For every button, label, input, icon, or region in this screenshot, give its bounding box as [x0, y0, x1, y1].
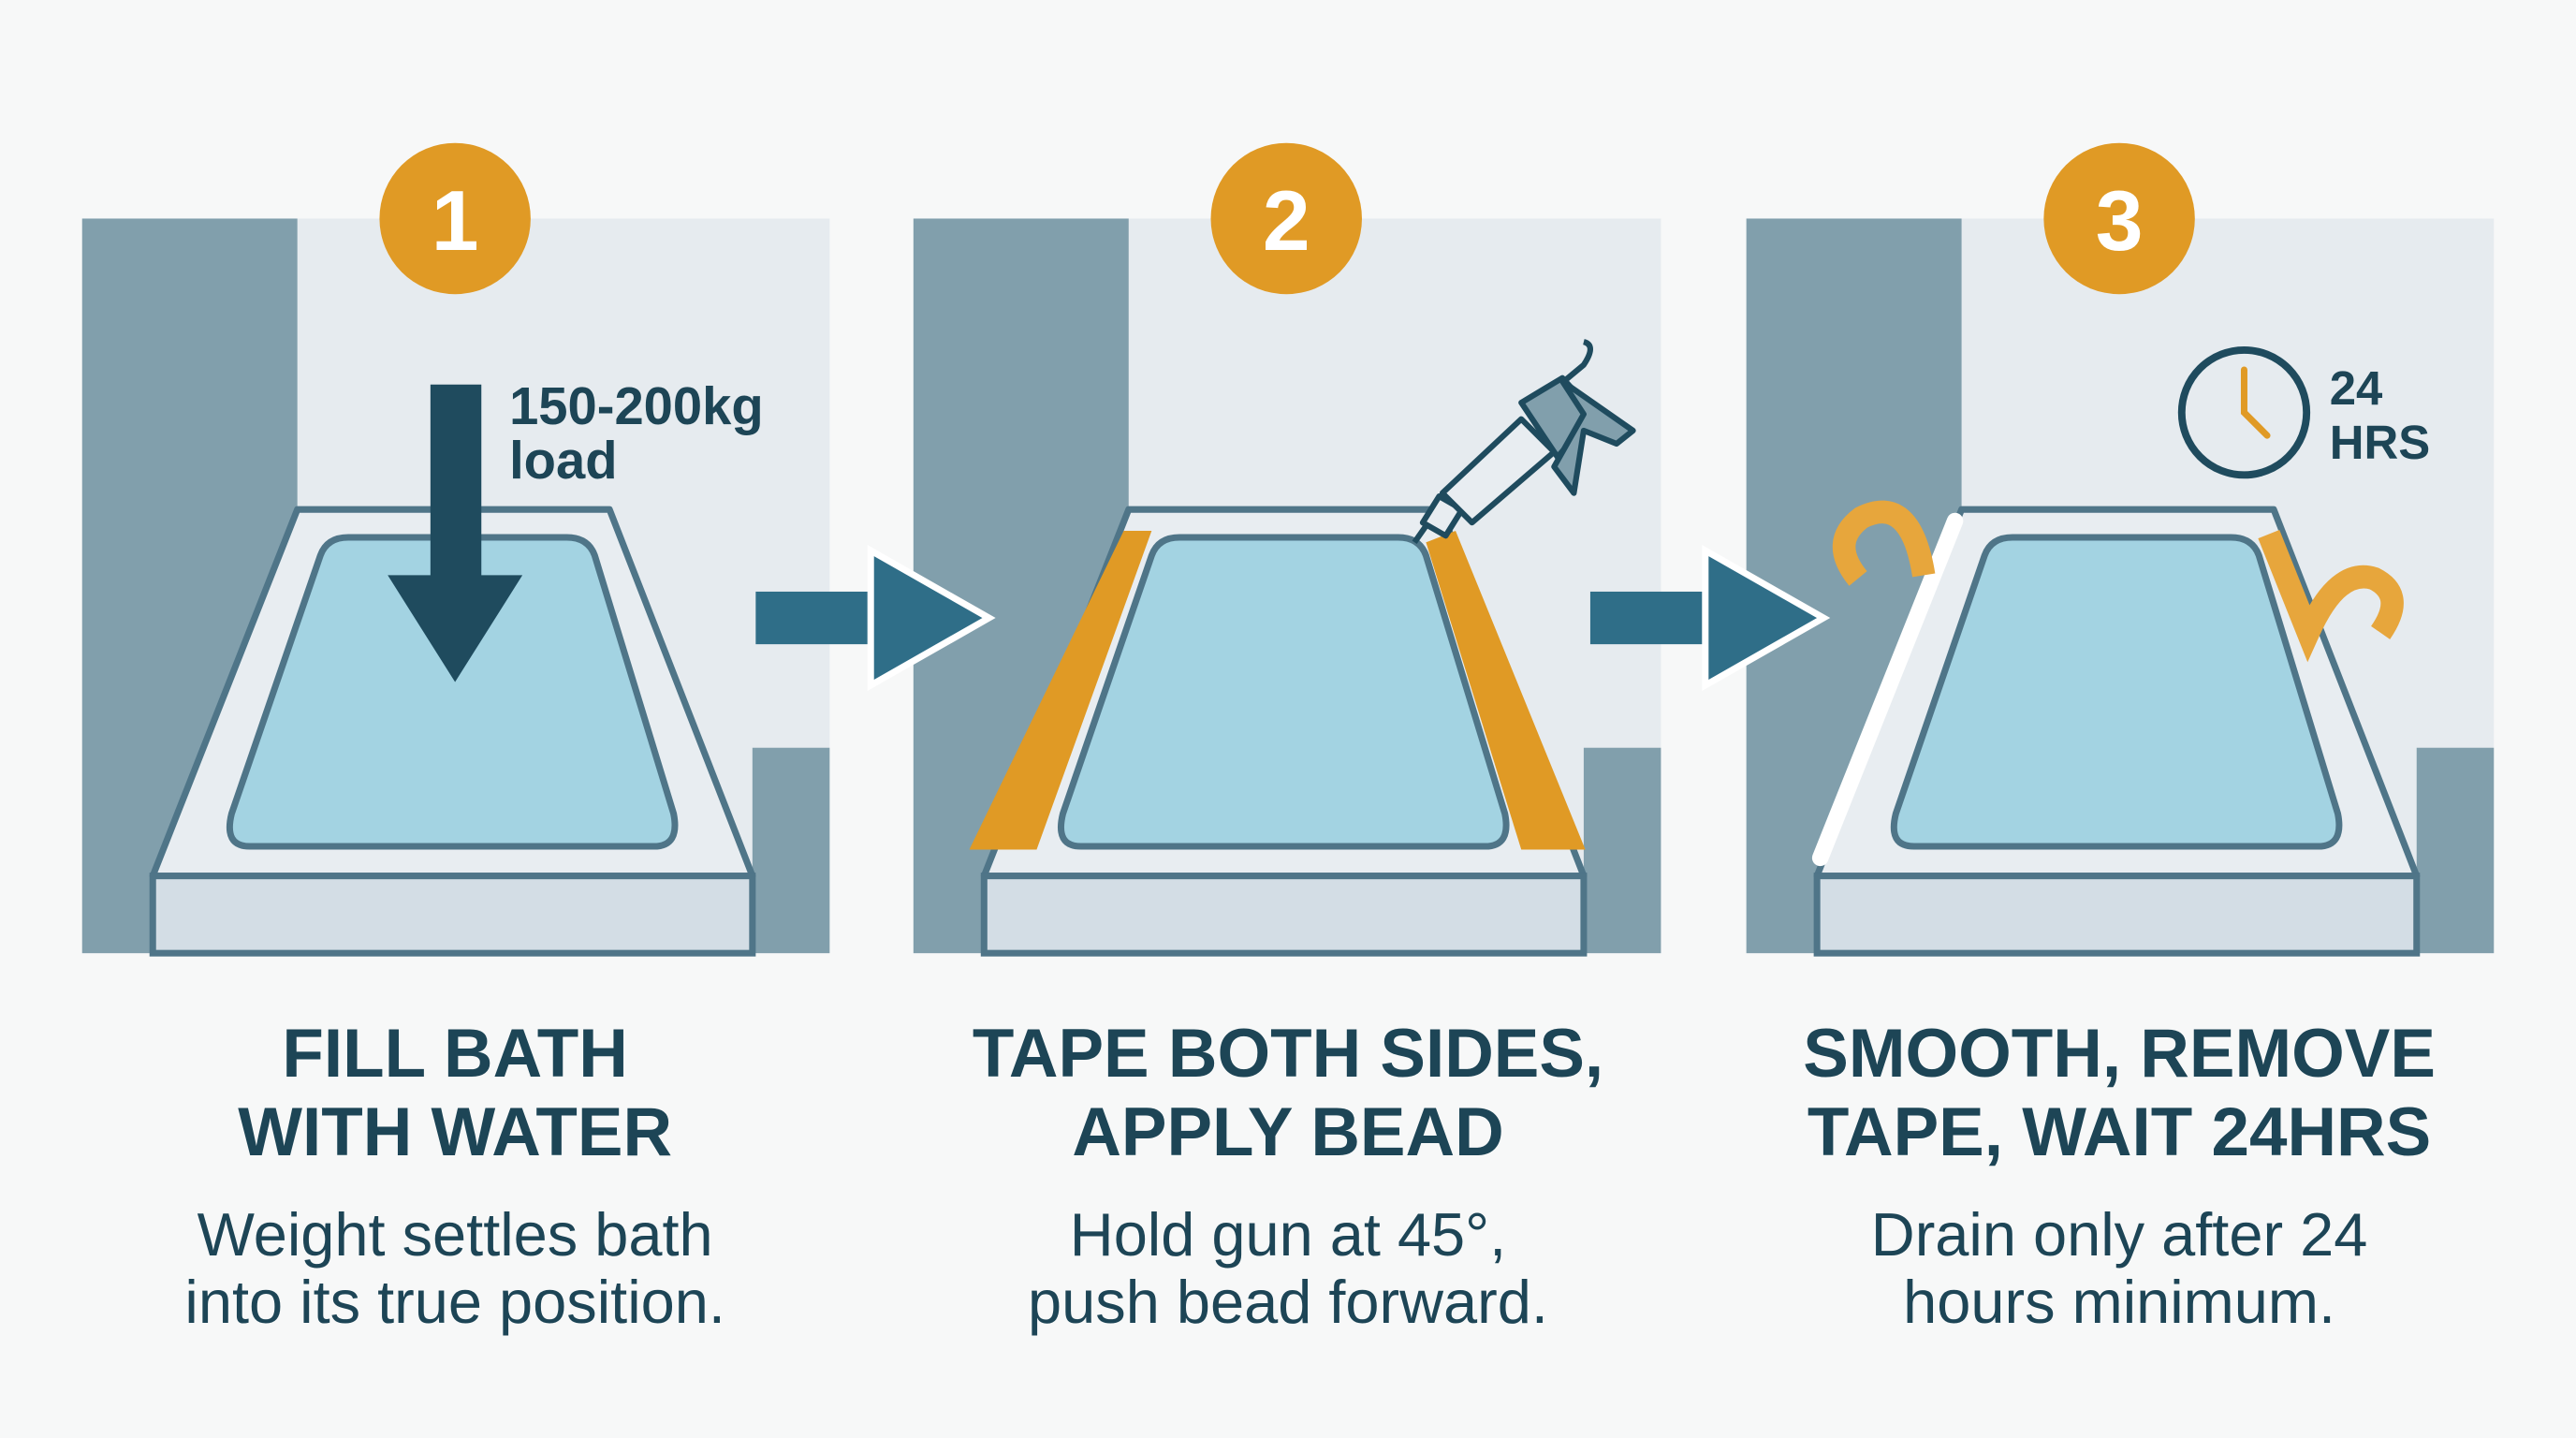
clock label: 24 — [2330, 361, 2383, 415]
text: step 1: into its true position. — [184, 1268, 725, 1336]
arrow: load — [388, 385, 522, 682]
caulk bead — [1821, 521, 1955, 858]
heading: step 1: FILL BATH — [282, 1016, 628, 1092]
panel: step 2 — [914, 143, 1661, 953]
bathtub 1 — [153, 509, 753, 953]
text: step 2: push bead forward. — [1028, 1268, 1548, 1336]
tape curls — [1844, 512, 2393, 633]
bathtub 2 — [984, 509, 1584, 953]
text: step 3 — [1871, 1200, 2367, 1336]
badge 3: 3 — [2096, 173, 2143, 269]
text: step 2 — [1028, 1200, 1548, 1336]
badge 1 — [379, 143, 531, 294]
panel: step 3 — [1747, 143, 2494, 953]
text: step 3: Drain only after 24 — [1871, 1200, 2367, 1269]
badge 3 — [2043, 143, 2195, 294]
panel: step 1 — [82, 143, 829, 953]
icon: clock — [2182, 350, 2306, 475]
text: step 1 — [184, 1200, 725, 1336]
badge 2: 2 — [1263, 173, 1310, 269]
heading: step 3 — [1803, 1016, 2436, 1170]
tape strips — [970, 531, 1586, 850]
arrow: 1 to 2 — [755, 550, 989, 685]
heading: step 2 — [973, 1016, 1603, 1170]
heading: step 3: SMOOTH, REMOVE — [1803, 1016, 2436, 1092]
badge 2 — [1211, 143, 1362, 294]
text: step 1: Weight settles bath — [198, 1200, 713, 1269]
text: step 2: Hold gun at 45°, — [1070, 1200, 1506, 1269]
text: step 3: hours minimum. — [1903, 1268, 2335, 1336]
heading: step 1 — [238, 1016, 672, 1170]
heading: step 2: APPLY BEAD — [1072, 1094, 1504, 1170]
load label — [509, 376, 764, 490]
icon: caulk gun — [1414, 342, 1633, 542]
arrow: 2 to 3 — [1590, 550, 1823, 685]
badge 1: 1 — [432, 173, 479, 269]
clock label: HRS — [2330, 416, 2430, 469]
bathtub 3 — [1817, 509, 2417, 953]
heading: step 1: WITH WATER — [238, 1094, 672, 1170]
load label: 150-200kg — [509, 376, 764, 435]
clock label — [2330, 361, 2430, 469]
load label: load — [509, 431, 618, 490]
heading: step 2: TAPE BOTH SIDES, — [973, 1016, 1603, 1092]
heading: step 3: TAPE, WAIT 24HRS — [1808, 1094, 2431, 1170]
